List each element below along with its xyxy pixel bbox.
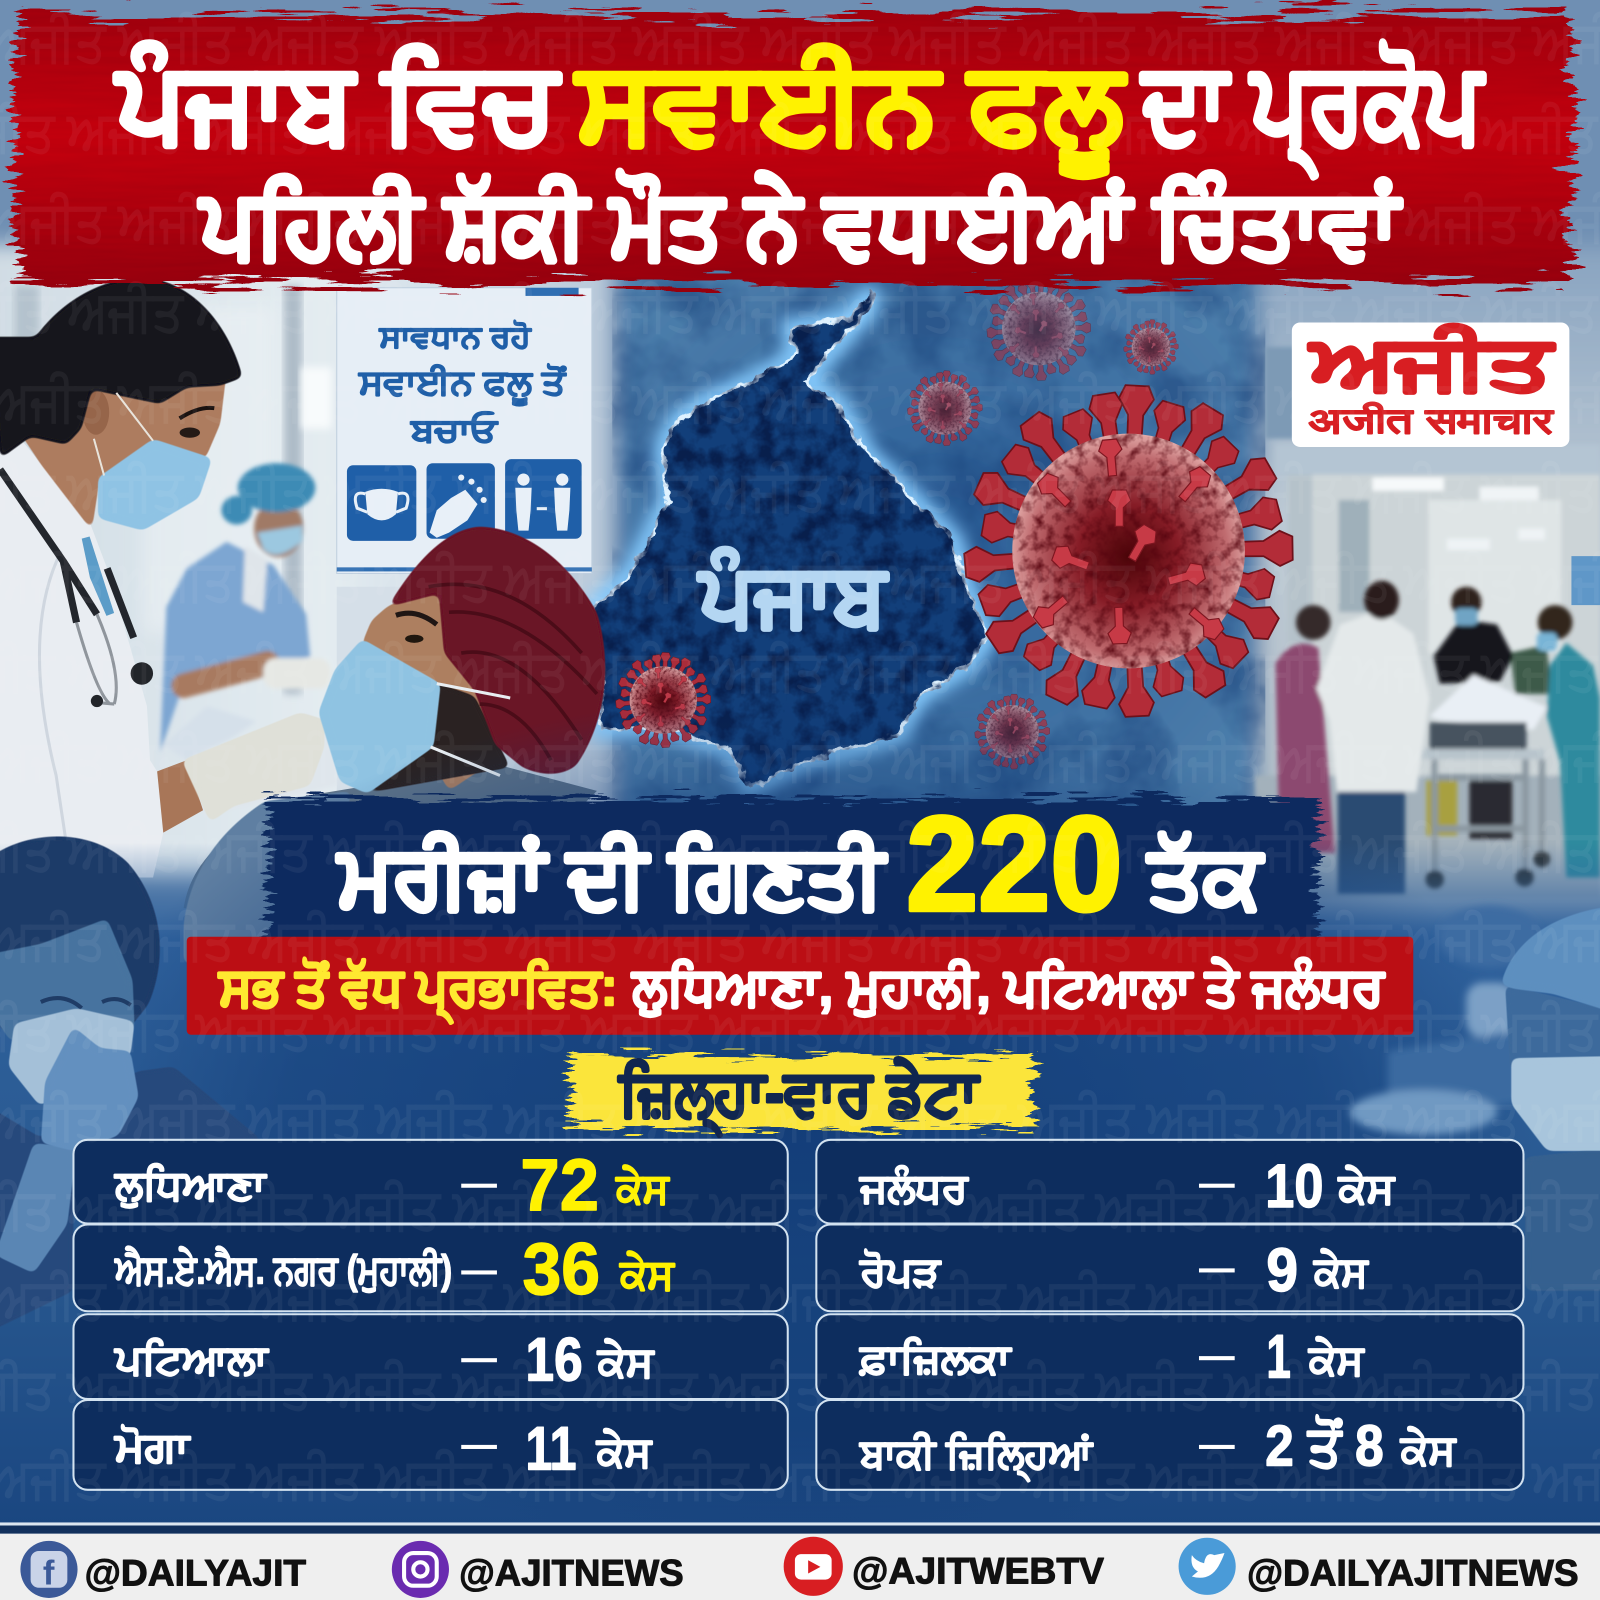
row: SAS Nagar: ਐਸ.ਏ.ਐਸ. ਨਗਰ (ਮੁਹਾਲੀ) — [115, 1246, 452, 1293]
row: Jalandhar: 10 — [1265, 1152, 1323, 1220]
patient shirt fade — [184, 791, 352, 964]
mask — [1511, 1056, 1600, 1151]
row: Ropar — [816, 1224, 1523, 1311]
attendant in teal — [1547, 643, 1600, 878]
title line 1: ਦਾ ਪ੍ਰਕੋਪ — [1140, 41, 1485, 180]
doctor in white coat — [1316, 610, 1430, 792]
row: SAS Nagar — [73, 1224, 788, 1311]
surgical mask — [318, 639, 441, 794]
map label: ਪੰਜਾਬ — [697, 546, 889, 643]
row: Moga — [73, 1400, 788, 1490]
title line 1: ਸਵਾਈਨ ਫਲੂ — [574, 41, 1126, 178]
large virus — [964, 385, 1293, 717]
forearm — [0, 1143, 77, 1273]
poster text: ਬਚਾਓ — [410, 410, 499, 448]
face — [0, 918, 135, 1041]
table right — [816, 1140, 1523, 1490]
handle: youtube: @AJITWEBTV — [852, 1551, 1105, 1592]
most affected bar: ਸਭ ਤੋਂ ਵੱਧ ਪ੍ਰਭਾਵਿਤ: — [218, 957, 617, 1025]
district data heading: ਜ਼ਿਲ੍ਹਾ-ਵਾਰ ਡੇਟਾ — [618, 1057, 980, 1137]
forearm — [157, 760, 203, 833]
masked nurse bottom right — [1350, 906, 1600, 1291]
row: SAS Nagar: 36 — [522, 1227, 600, 1310]
patient count banner — [267, 788, 1318, 951]
scrubs — [1524, 1151, 1600, 1291]
icon: facebook: f — [43, 1555, 55, 1593]
skin — [20, 372, 227, 531]
icon: mask — [347, 465, 416, 541]
row: Ropar: ਰੋਪੜ — [859, 1249, 942, 1295]
most affected bar — [187, 937, 1413, 1035]
title line 2: ਪਹਿਲੀ ਸ਼ੱਕੀ ਮੌਤ ਨੇ ਵਧਾਈਆਂ ਚਿੰਤਾਵਾਂ — [198, 170, 1402, 276]
icon: facebook — [20, 1541, 78, 1598]
stethoscope — [0, 469, 134, 638]
person in green — [1510, 645, 1553, 694]
face — [1505, 985, 1600, 1071]
icon: twitter — [1179, 1538, 1236, 1595]
map of Punjab — [592, 291, 987, 788]
shawl — [0, 1066, 265, 1332]
handle: facebook: @DAILYAJIT — [85, 1553, 307, 1594]
hospital corridor scene — [1255, 347, 1600, 898]
small virus top — [987, 277, 1091, 381]
icon: youtube — [784, 1537, 843, 1596]
surgical cap — [1501, 906, 1600, 1012]
table left — [73, 1140, 788, 1490]
mask — [8, 1008, 135, 1106]
patient count banner: ਮਰੀਜ਼ਾਂ ਦੀ ਗਿਣਤੀ — [337, 829, 888, 925]
row: other districts: ਬਾਕੀ ਜ਼ਿਲ੍ਹਿਆਂ — [858, 1430, 1094, 1483]
center shade — [66, 694, 1536, 1551]
row: other districts: ਕੇਸ — [1400, 1426, 1457, 1472]
row: other districts: 2 ਤੋਂ 8 — [1265, 1414, 1384, 1478]
logo — [1292, 321, 1569, 447]
awareness poster — [337, 288, 592, 832]
icon: washing hands — [427, 463, 495, 539]
row: other districts — [816, 1400, 1523, 1490]
glove — [182, 712, 324, 822]
icon: instagram — [392, 1541, 449, 1598]
row: Fazilka: 1 — [1266, 1323, 1291, 1391]
title banner — [14, 14, 1571, 284]
handle: twitter: @DAILYAJITNEWS — [1247, 1553, 1579, 1594]
mask — [98, 439, 212, 531]
stretcher — [1427, 781, 1457, 836]
row: Moga: ਕੇਸ — [596, 1428, 653, 1474]
handle: instagram: @AJITNEWS — [459, 1553, 684, 1594]
poster text — [358, 319, 567, 448]
hospital staff in pink — [1276, 644, 1335, 853]
row: Moga: 11 — [526, 1414, 577, 1482]
woman coughing — [0, 836, 265, 1332]
hair — [0, 278, 243, 459]
footer — [0, 1522, 1600, 1600]
logo: ਅਜੀਤ — [1309, 321, 1555, 404]
patient count banner: ਤੱਕ — [1147, 829, 1265, 925]
row: Fazilka: ਕੇਸ — [1308, 1336, 1365, 1382]
small virus top right — [1124, 319, 1178, 374]
row: Jalandhar — [816, 1140, 1523, 1223]
poster text: ਸਾਵਧਾਨ ਰਹੋ — [379, 319, 532, 354]
attendant in black — [1434, 619, 1513, 684]
patient count banner: 220 — [906, 788, 1122, 939]
lower background — [0, 843, 1600, 1531]
hair — [0, 836, 160, 1031]
row: Ropar: 9 — [1266, 1236, 1298, 1304]
row: Jalandhar: ਕੇਸ — [1338, 1165, 1396, 1211]
row: Ludhiana: ਲੁਧਿਆਣਾ — [113, 1162, 268, 1208]
row: Patiala: ਪਟਿਆਲਾ — [113, 1336, 270, 1382]
row: Patiala — [73, 1314, 788, 1399]
small virus bottom — [975, 694, 1050, 769]
row: Patiala: 16 — [526, 1326, 583, 1394]
small virus on map — [616, 652, 711, 748]
title line 1: ਪੰਜਾਬ ਵਿਚ — [114, 41, 561, 164]
row: Patiala: ਕੇਸ — [597, 1339, 655, 1385]
doctor — [0, 278, 324, 878]
small virus middle — [907, 371, 982, 446]
hand — [41, 1027, 139, 1151]
background nurse — [160, 463, 337, 816]
row: Moga: ਮੋਗਾ — [114, 1424, 191, 1470]
turban — [388, 527, 605, 774]
row: SAS Nagar: ਕੇਸ — [619, 1251, 675, 1297]
row: Ludhiana: 72 — [520, 1143, 599, 1226]
icon: distancing — [505, 459, 582, 539]
poster text: ਸਵਾਈਨ ਫਲੂ ਤੋਂ — [358, 362, 567, 406]
row: Ludhiana — [73, 1140, 788, 1226]
row: Ropar: ਕੇਸ — [1313, 1249, 1369, 1295]
title line 1 — [114, 41, 1485, 180]
row: Ludhiana: ਕੇਸ — [615, 1165, 670, 1211]
row: Jalandhar: ਜਲੰਧਰ — [858, 1165, 969, 1211]
row: Fazilka: ਫ਼ਾਜ਼ਿਲਕਾ — [859, 1335, 1013, 1381]
logo: अजीत समाचार — [1308, 401, 1556, 442]
patient — [184, 527, 605, 918]
most affected bar: ਲੁਧਿਆਣਾ, ਮੁਹਾਲੀ, ਪਟਿਆਲਾ ਤੇ ਜਲੰਧਰ — [631, 957, 1386, 1017]
row: Fazilka — [816, 1314, 1523, 1399]
